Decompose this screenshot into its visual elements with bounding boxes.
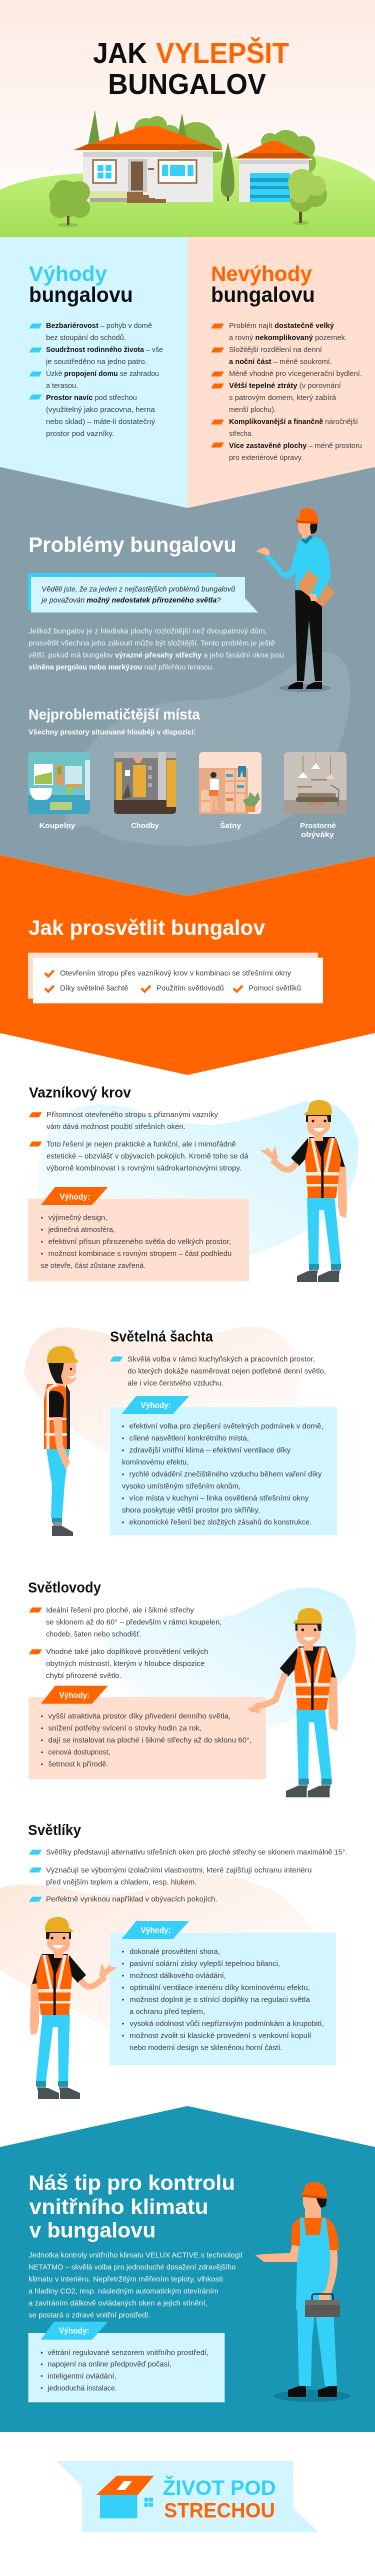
blob: peach background: [24, 1326, 299, 1455]
text block: VELUX ACTIVE: a hladiny CO2, resp. následným automatickým otevíráním: [28, 2289, 218, 2296]
text block: VELUX ACTIVE: se postará o zdravé vnitřní prostředí.: [28, 2313, 150, 2320]
section: Světlíky: [0, 1823, 347, 2099]
list: advantages: prostor pod vazníky.: [46, 431, 114, 438]
text block: VELUX ACTIVE: klimatu v interiéru. Nepřetržitým měřením teploty, vlhkosti: [28, 2277, 223, 2284]
heading: Nevýhody bungalovu: Nevýhody: [211, 263, 312, 286]
benefits box: dají se instalovat na ploché i šikmé střechy až do sklonu 60°,: [48, 1737, 252, 1745]
text block: problem description: [28, 628, 284, 672]
list: disadvantages: Více zastavěné plochy – méně prostoru: [229, 443, 362, 450]
benefits box: [28, 1187, 249, 1281]
list: disadvantages: pro exteriérové úpravy.: [229, 455, 303, 462]
room labels: Prostorné: [300, 823, 336, 830]
heading: Nevýhody bungalovu: bungalovu: [211, 284, 315, 307]
list: disadvantages: [211, 323, 362, 462]
heading: our tip: [28, 2172, 235, 2242]
blob: light blue background: [37, 1101, 358, 1280]
heading: Výhody bungalovu: bungalovu: [29, 284, 133, 307]
list: advantages: Soudržnost rodinného života – vše: [46, 347, 163, 354]
disadvantages column: [211, 263, 362, 462]
figure: worker waving: [260, 1100, 347, 1282]
benefits box: Výhody:: [60, 1192, 90, 1202]
text block: VELUX ACTIVE: a zavíráním dálkově ovládaných oken a jejich stínění,: [28, 2301, 207, 2308]
list: advantages: [29, 323, 163, 438]
text block: problem description: větší, pokud má bungalov výrazné přesahy střechy a jeho fasádní okna jsou: [28, 653, 284, 660]
room tile: living room: [284, 752, 346, 814]
title: BUNGALOV: [108, 69, 267, 101]
benefits box: jedinečná atmosféra,: [47, 1227, 115, 1234]
bullet text: estetické – obzvlášť v obývacích pokojích. Kromě toho se dá: [46, 1153, 248, 1160]
benefits box: Výhody:: [59, 1691, 90, 1700]
benefits box: [110, 1396, 337, 1535]
benefits box: [28, 2322, 225, 2402]
illustration: bungalow with garden: [0, 110, 375, 237]
benefits box: [29, 1686, 266, 1779]
list: disadvantages: s patrovým domem, který zabírá: [229, 395, 336, 402]
bullet text: Perfektně vyniknou například v obývacích pokojích.: [46, 1897, 217, 1904]
hero panel: [0, 0, 375, 237]
heading: Výhody bungalovu: [29, 263, 133, 307]
benefits box: vyšší atraktivita prostor díky přivedení denního světla,: [48, 1714, 231, 1721]
list: disadvantages: Větší tepelné ztráty (v porovnání: [229, 383, 341, 390]
bullet text: Vhodné také jako doplňkové prosvětlení velkých: [46, 1649, 208, 1656]
bullet text: před vnějším teplem a chladem, resp. hlukem.: [46, 1879, 197, 1886]
bullet text: do kterých dokáže nasměrovat nejen potřebné denní světlo,: [128, 1368, 326, 1375]
room labels: [39, 821, 336, 839]
bullet text: Světlíky představují alternativu střešních oken pro ploché střechy se sklonem maximálně 15°.: [46, 1849, 347, 1857]
bullet text: Vyznačují se výbornými izolačními vlastnostmi, které zajišťují ochranu interiéru: [46, 1867, 312, 1874]
benefits box: možnost doplnit je o stínící doplňky na regulaci světla: [130, 1997, 310, 2004]
title: JAK: [93, 38, 147, 70]
title: VYLEPŠIT: [156, 36, 289, 70]
benefits box: Výhody:: [59, 2327, 89, 2336]
heading: our tip: v bungalovu: [29, 2219, 156, 2242]
list: disadvantages: Komplikovanější a finančně náročnější: [229, 419, 358, 426]
icon: house: [96, 2476, 154, 2518]
checklist card: Díky světelné šachtě: [60, 986, 128, 993]
benefits box: možnost kombinace s rovným stropem – část podhledu: [48, 1251, 232, 1258]
panel: disadvantages background: [188, 237, 375, 509]
benefits box: napojení na online předpověď počasí,: [48, 2362, 172, 2369]
heading: Jak prosvětlit bungalov: Jak prosvětlit bungalov: [28, 917, 265, 940]
heading: most problematic places: Nejproblematičtější místa: [28, 708, 201, 724]
text block: VELUX ACTIVE: [28, 2253, 243, 2320]
room tile: bathroom: [28, 752, 90, 814]
benefits box: rychlé odvádění znečištěného vzduchu během vaření díky: [129, 1472, 322, 1479]
room labels: obýváky: [301, 832, 334, 839]
checklist card: Použitím světlovodů: [156, 985, 224, 993]
list: advantages: a terasou.: [46, 383, 78, 390]
figure: worker in overalls with toolbox: [255, 2182, 350, 2402]
benefits box: možnost zvolit si klasické provedení s venkovní kopulí: [130, 2033, 311, 2040]
bullet text: chodeb, šaten nebo schodišť.: [46, 1631, 141, 1638]
benefits box: vysoko umístěným střešním oknům,: [122, 1483, 241, 1491]
list: advantages: bez stoupání do schodů.: [46, 334, 126, 342]
benefits box: komínovému efektu,: [122, 1460, 189, 1467]
list: disadvantages: Složitější rozdělení na denní: [229, 347, 322, 354]
logo wordmark: ŽIVOT POD: [163, 2476, 276, 2500]
bullet text: výborně kombinovat i s rovnými sádrokartonovými stropy.: [46, 1165, 242, 1172]
benefits box: cenová dostupnost,: [48, 1750, 110, 1757]
blob: light blue background: [105, 1588, 356, 1727]
benefits box: efektivní volba pro zlepšení světelných podmínek v domě,: [129, 1424, 323, 1431]
heading: our tip: Náš tip pro kontrolu: [28, 2172, 235, 2195]
text block: VELUX ACTIVE: Jednotka kontroly vnitřního klimatu VELUX ACTIVE s technologií: [28, 2253, 243, 2260]
room labels: Koupelny: [39, 823, 75, 830]
list: disadvantages: a rovný nekomplikovaný pozemek.: [229, 335, 347, 342]
section: Vazníkový krov: [28, 1085, 358, 1282]
benefits box: inteligentní ovládání,: [48, 2373, 116, 2380]
checklist card: [28, 953, 323, 1003]
section: Světlovody: [28, 1581, 356, 1797]
benefits box: optimální ventilace interiéru díky komínovému efektu,: [130, 1985, 310, 1992]
benefits box: snížení potřeby svícení o stovky hodin za rok,: [48, 1726, 202, 1733]
text block: problem description: prosvětlit všechna jeho zákoutí může být složitější. Tento problém je ještě: [28, 640, 275, 648]
figure: worker gesturing: [248, 1608, 338, 1797]
benefits box: cílené nasvětlení konkrétního místa,: [129, 1436, 249, 1443]
text block: problem description: stíněna pergolou nebo markýzou nad přilehlou terasou.: [28, 665, 214, 672]
list: disadvantages: Problém najít dostatečně velký: [229, 323, 334, 330]
room tile: walk-in closet: [199, 752, 262, 814]
panel: tip: [0, 2106, 375, 2432]
logo wordmark: [163, 2476, 276, 2523]
text block: VELUX ACTIVE: NETATMO – skvělá volba pro jednoduché dosažení zdravějšího: [28, 2265, 236, 2272]
list: advantages: nebo sklad) – máte-li dostatečný: [46, 419, 156, 426]
heading: Vazníkový krov: [29, 1085, 131, 1101]
checklist card: Otevřením stropu přes vazníkový krov v kombinaci se střešními okny: [60, 970, 292, 977]
benefits box: nebo moderní design se skleněnou horní částí.: [130, 2045, 282, 2052]
bullet text: chybí přirozené světlo.: [46, 1673, 121, 1680]
icon: checks: [45, 970, 242, 992]
heading: Problémy bungalovu: Problémy bungalovu: [28, 534, 236, 557]
list: advantages: (využitelný jako pracovna, herna: [46, 407, 155, 414]
bullet text: Přítomnost otevřeného stropu s přiznanými vazníky: [46, 1112, 219, 1119]
room labels: Chodby: [131, 823, 159, 830]
benefits box: dokonalé prosvětlení shora,: [130, 1949, 220, 1956]
benefits box: Výhody:: [141, 1401, 171, 1410]
list: disadvantages: a noční část – méně soukromí.: [229, 359, 332, 366]
list: advantages: Bezbariérovost – pohyb v domě: [46, 323, 152, 330]
heading: Světlíky: [28, 1823, 81, 1839]
logo wordmark: STRECHOU: [164, 2500, 275, 2523]
figure: man with clipboard: [256, 508, 335, 692]
room labels: Šatny: [220, 821, 241, 830]
benefits box: možnost dálkového ovládání,: [130, 1973, 226, 1980]
blob: peach background: [0, 1873, 316, 2030]
logo: Život pod střechou: [57, 2461, 318, 2532]
benefits box: více místa v kuchyni – linka osvětlená střešními okny: [129, 1496, 309, 1503]
bullet text: [29, 1607, 222, 1680]
benefits box: výjimečný design,: [48, 1215, 107, 1222]
figure: worker waving right: [30, 1917, 117, 2099]
heading: Nevýhody bungalovu: [211, 263, 315, 307]
list: advantages: je soustředěno na jedno patro.: [45, 359, 147, 366]
heading: Světlovody: [28, 1581, 101, 1597]
panel: how to light: [0, 855, 375, 1075]
benefits box: šetrnost k přírodě.: [48, 1762, 108, 1769]
heading: our tip: vnitřního klimatu: [29, 2196, 208, 2219]
list: disadvantages: střecha.: [229, 431, 253, 438]
section: Světelná šachta: [24, 1326, 337, 1536]
benefits box: Výhody:: [141, 1926, 171, 1935]
panel: advantages background: [0, 237, 188, 509]
bullet text: [29, 1112, 248, 1172]
bullet text: [29, 1849, 347, 1904]
panel: problems section background: [0, 467, 375, 896]
benefits box: zdravější vnitřní klima – efektivní ventilace díky: [129, 1448, 291, 1455]
bullet text: [110, 1356, 326, 1387]
heading: most problematic places: [28, 708, 201, 737]
advantages column: [29, 263, 163, 438]
bullet text: Skvělá volba v rámci kuchyňských a pracovních prostor,: [128, 1356, 315, 1363]
list: advantages: Úzké propojení domu se zahradou: [46, 369, 159, 378]
list: disadvantages: Méně vhodné pro vícegenerační bydlení.: [229, 371, 362, 378]
benefits box: ekonomické řešení bez složitých zásahů do konstrukce.: [129, 1519, 312, 1527]
benefits box: jednoduchá instalace.: [47, 2385, 117, 2392]
bullet text: Ideální řešení pro ploché, ale i šikmé střechy: [46, 1607, 195, 1614]
benefits box: vysoká odolnost vůči nepříznivým podmínkám a krupobití,: [130, 2020, 324, 2028]
bullet text: ale i více čerstvého vzduchu.: [128, 1380, 223, 1387]
bullet text: obytných místností, kterým v hloubce dispozice: [46, 1661, 205, 1668]
benefits box: a ochranu před teplem,: [130, 2009, 205, 2016]
logo banner: [57, 2461, 318, 2532]
benefits box: [110, 1921, 336, 2065]
bullet text: se sklonem až do 60° – především v rámci koupelen,: [46, 1618, 222, 1626]
benefits box: pasivní solární zisky vylepší tepelnou bilanci,: [130, 1961, 280, 1968]
callout: natural light question: je považován možný nedostatek přirozeného světla ?: [41, 598, 221, 604]
checklist card: Pomocí světlíků: [249, 985, 301, 993]
list: advantages: Prostor navíc pod střechou: [46, 395, 137, 402]
bullet text: Toto řešení je nejen praktické a funkční, ale i mimořádně: [46, 1141, 236, 1148]
benefits box: se otevře, část zůstane zavřená.: [41, 1262, 146, 1270]
text block: problem description: Jelikož bungalov je z hlediska plochy rozložitější než dvoupatrový dům,: [28, 628, 267, 636]
heading: Výhody bungalovu: Výhody: [29, 263, 107, 286]
benefits box: větrání regulované senzorem vnitřního prostředí,: [48, 2350, 209, 2357]
figure: worker side view: [44, 1346, 79, 1536]
heading: Světelná šachta: [110, 1330, 214, 1346]
bullet text: vám dává možnost použití střešních oken.: [46, 1124, 185, 1131]
room tile: hallway: [114, 752, 176, 814]
benefits box: shora poskytuje větší prostor pro skříňky,: [122, 1508, 260, 1515]
callout: natural light question: [28, 573, 258, 612]
callout: natural light question: Věděli jste, že za jeden z nejčastějších problémů bungalovů: [42, 586, 235, 594]
heading: most problematic places: Všechny prostory situované hlouběji v dispozici:: [28, 730, 196, 737]
list: disadvantages: menší plochu).: [229, 407, 276, 414]
benefits box: efektivní přísun přirozeného světla do velkých prostor,: [48, 1239, 231, 1246]
title: [93, 36, 289, 101]
